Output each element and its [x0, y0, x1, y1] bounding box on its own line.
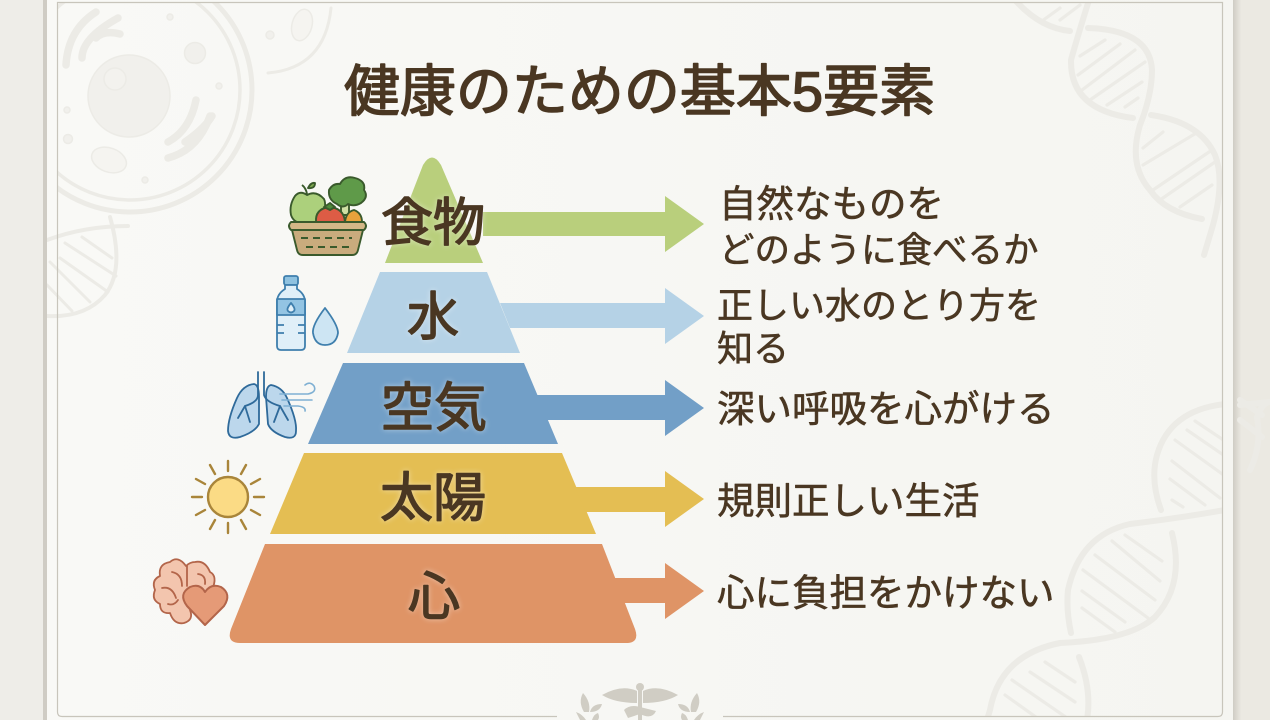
- tier: air: [308, 363, 558, 444]
- background decoration: lower-left DNA: [47, 217, 128, 316]
- label: 食物: 食物: [381, 195, 485, 253]
- tier: food: [385, 158, 483, 263]
- label: 水: 水: [407, 289, 459, 347]
- arrow: sun: [575, 471, 704, 527]
- icon: water bottle: [277, 276, 338, 350]
- text: food description: どのように食べるか: [719, 230, 1039, 270]
- icon: heart: [183, 586, 227, 625]
- text: food description: [719, 183, 1039, 270]
- text: heart description: 心に負担をかけない: [717, 572, 1054, 614]
- label: 太陽: 太陽: [380, 469, 486, 528]
- icon: lungs with wind: [228, 372, 315, 438]
- text: water description: 正しい水のとり方を: [717, 285, 1041, 326]
- emblem: caduceus with laurel: [576, 683, 704, 720]
- label: 心: 心: [408, 569, 460, 627]
- icon: brain and heart: [154, 559, 227, 625]
- text: water description: 知る: [717, 328, 789, 369]
- arrow: heart: [612, 563, 704, 619]
- pyramid: [230, 158, 636, 643]
- text: sun description: 規則正しい生活: [717, 480, 980, 522]
- text: air description: 深い呼吸を心がける: [717, 388, 1054, 430]
- icon: food basket: [289, 177, 366, 255]
- background decoration: cell illustration: [58, 3, 332, 214]
- tier: heart: [230, 544, 636, 643]
- background decoration: lower-right DNA: [987, 404, 1225, 720]
- tier: sun: [270, 453, 596, 534]
- icon: sun: [192, 461, 264, 533]
- tier: water: [347, 272, 520, 353]
- icon: water drop: [313, 308, 338, 345]
- arrow: food: [483, 196, 704, 252]
- text: food description: 自然なものを: [719, 183, 944, 225]
- background decoration: outer DNA at right edge: [1240, 400, 1270, 470]
- title: 健康のための基本5要素: [344, 60, 935, 123]
- arrow: air: [535, 380, 704, 436]
- arrow: water: [500, 288, 704, 344]
- background decoration: upper-right DNA: [1015, 0, 1220, 255]
- label: 空気: 空気: [381, 379, 487, 438]
- text: water description: [717, 285, 1041, 369]
